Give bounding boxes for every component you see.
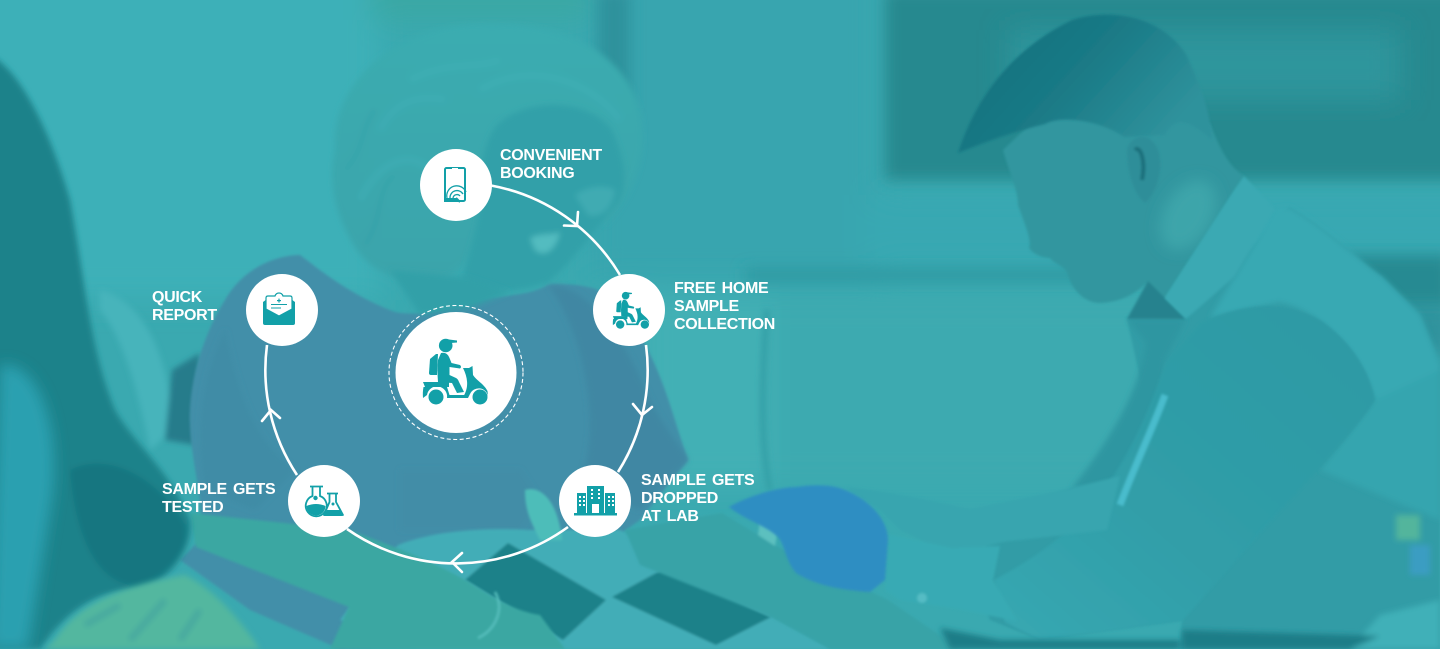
label: free home sample collection: SAMPLE — [674, 298, 739, 315]
man's hair — [958, 15, 1212, 153]
left foreground person — [0, 55, 191, 649]
man's upper arm and sleeve — [994, 306, 1375, 640]
label: free home sample collection: FREE HOME — [674, 280, 768, 297]
blurred items bottom right — [940, 515, 1440, 649]
icon: delivery rider on scooter — [423, 339, 488, 404]
label: quick report: REPORT — [152, 307, 217, 324]
man's cuff and forearm behind — [845, 476, 1120, 621]
label: sample gets dropped at lab — [641, 472, 754, 525]
label: free home sample collection: COLLECTION — [674, 316, 775, 333]
arrowheads — [262, 212, 652, 572]
label: convenient booking: CONVENIENT — [500, 147, 602, 164]
man's ear — [1127, 137, 1160, 203]
man's shirt torso — [960, 207, 1440, 649]
man's face and neck — [1003, 110, 1244, 319]
node 4: sample gets tested — [288, 465, 360, 537]
center badge — [389, 306, 523, 440]
man's lanyard — [1120, 395, 1165, 505]
patient's arms — [190, 513, 960, 649]
label: sample gets tested: SAMPLE GETS — [162, 481, 275, 498]
icon: phone with touch — [444, 168, 466, 202]
label: free home sample collection — [674, 280, 775, 333]
label: quick report: QUICK — [152, 289, 202, 306]
node 2: free home sample collection — [593, 274, 665, 346]
cycle ring segments — [265, 186, 648, 563]
woman's hair — [332, 24, 642, 282]
sofa seams — [100, 290, 770, 490]
label: convenient booking: BOOKING — [500, 165, 574, 182]
icon: scooter rider small — [613, 292, 649, 329]
woman's dress — [180, 255, 688, 649]
label: sample gets dropped at lab: SAMPLE GETS — [641, 472, 754, 489]
neck highlight — [1148, 170, 1228, 260]
label: sample gets tested: TESTED — [162, 499, 223, 516]
icon: flasks — [306, 486, 343, 516]
label: sample gets tested — [162, 481, 276, 516]
neck and necklace area — [390, 270, 510, 315]
label: sample gets dropped at lab: AT LAB — [641, 508, 699, 525]
node 3: sample gets dropped at lab — [559, 465, 631, 537]
node 5: quick report — [246, 274, 318, 346]
blanket with check pattern — [340, 489, 830, 649]
man's collar — [1165, 176, 1275, 319]
gloved hands — [729, 485, 888, 592]
label: quick report — [152, 289, 217, 324]
icon: lab building — [574, 486, 617, 516]
label: sample gets dropped at lab: DROPPED — [641, 490, 718, 507]
node 1: convenient booking — [420, 149, 492, 221]
icon: open envelope with report — [263, 293, 295, 325]
left person's patterned sleeve — [45, 575, 260, 649]
label: convenient booking — [500, 147, 602, 182]
woman's face — [462, 105, 625, 290]
